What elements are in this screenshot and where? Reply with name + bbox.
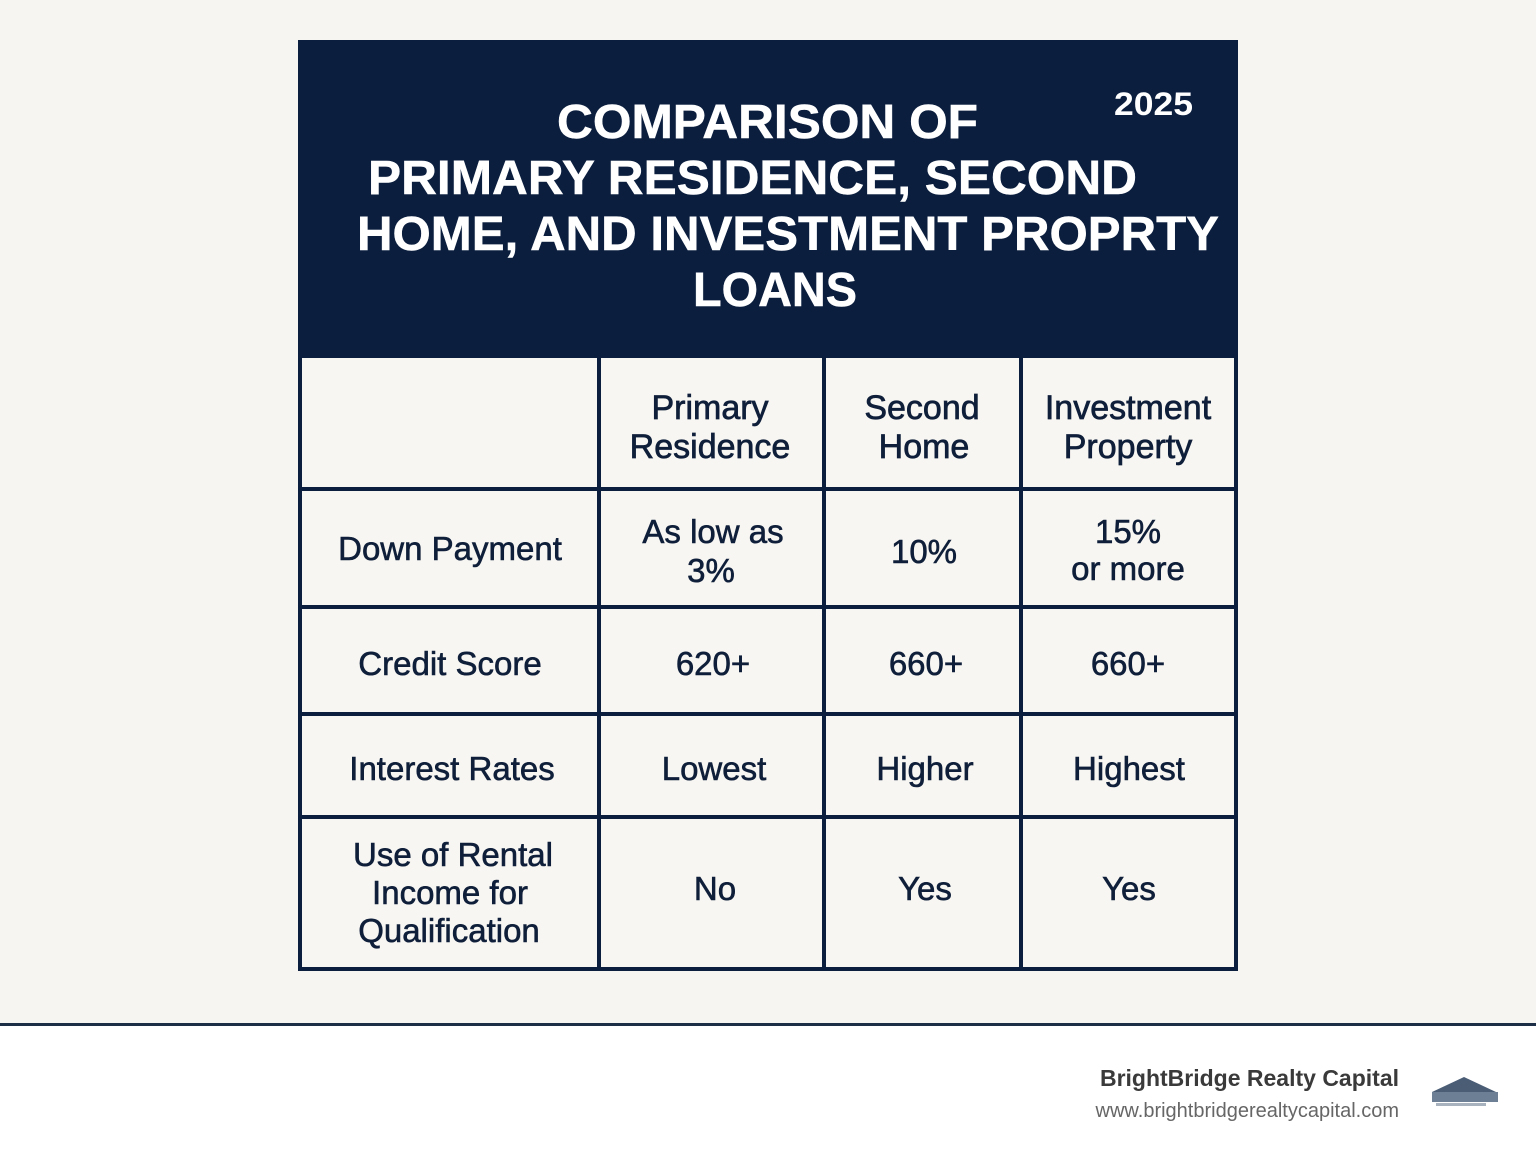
cell values: Yes [898,870,952,907]
cell values: 10% [891,533,957,570]
column headers: Investment [1045,389,1212,427]
column headers: Home [879,428,969,466]
header panel [298,40,1238,358]
row labels [338,530,562,949]
row labels: Income for [372,874,528,911]
website: www.brightbridgerealtycapital.com [1095,1100,1399,1122]
column headers: Primary [651,389,769,427]
row labels: Interest Rates [349,750,555,787]
title: LOANS [693,264,857,317]
title: PRIMARY RESIDENCE, SECOND [368,152,1137,205]
icon: logo [1432,1077,1498,1106]
cell values: 15% [1095,513,1161,550]
column headers: Second [864,389,980,427]
column headers [630,389,1212,466]
title [357,96,1219,317]
column headers: Residence [630,428,790,466]
row labels: Down Payment [338,530,562,567]
cell values: 620+ [676,645,750,682]
cell values [642,513,1185,907]
cell values: 660+ [1091,645,1165,682]
cell values: Yes [1102,870,1156,907]
company name: BrightBridge Realty Capital [1100,1065,1399,1091]
title: COMPARISON OF [557,96,978,149]
cell values: 3% [687,552,735,589]
cell values: 660+ [889,645,963,682]
comparison table [300,356,1236,969]
footer [0,1023,1536,1154]
cell values: Highest [1073,750,1185,787]
cell values: or more [1071,550,1185,587]
row labels: Use of Rental [353,836,553,873]
row labels: Qualification [358,912,540,949]
title: HOME, AND INVESTMENT PROPRTY [357,208,1219,261]
column headers: Property [1064,428,1192,466]
cell values: No [694,870,736,907]
cell values: As low as [642,513,784,550]
cell values: Higher [876,750,974,787]
row labels: Credit Score [358,645,542,682]
cell values: Lowest [662,750,766,787]
year label: 2025 [1114,86,1193,122]
